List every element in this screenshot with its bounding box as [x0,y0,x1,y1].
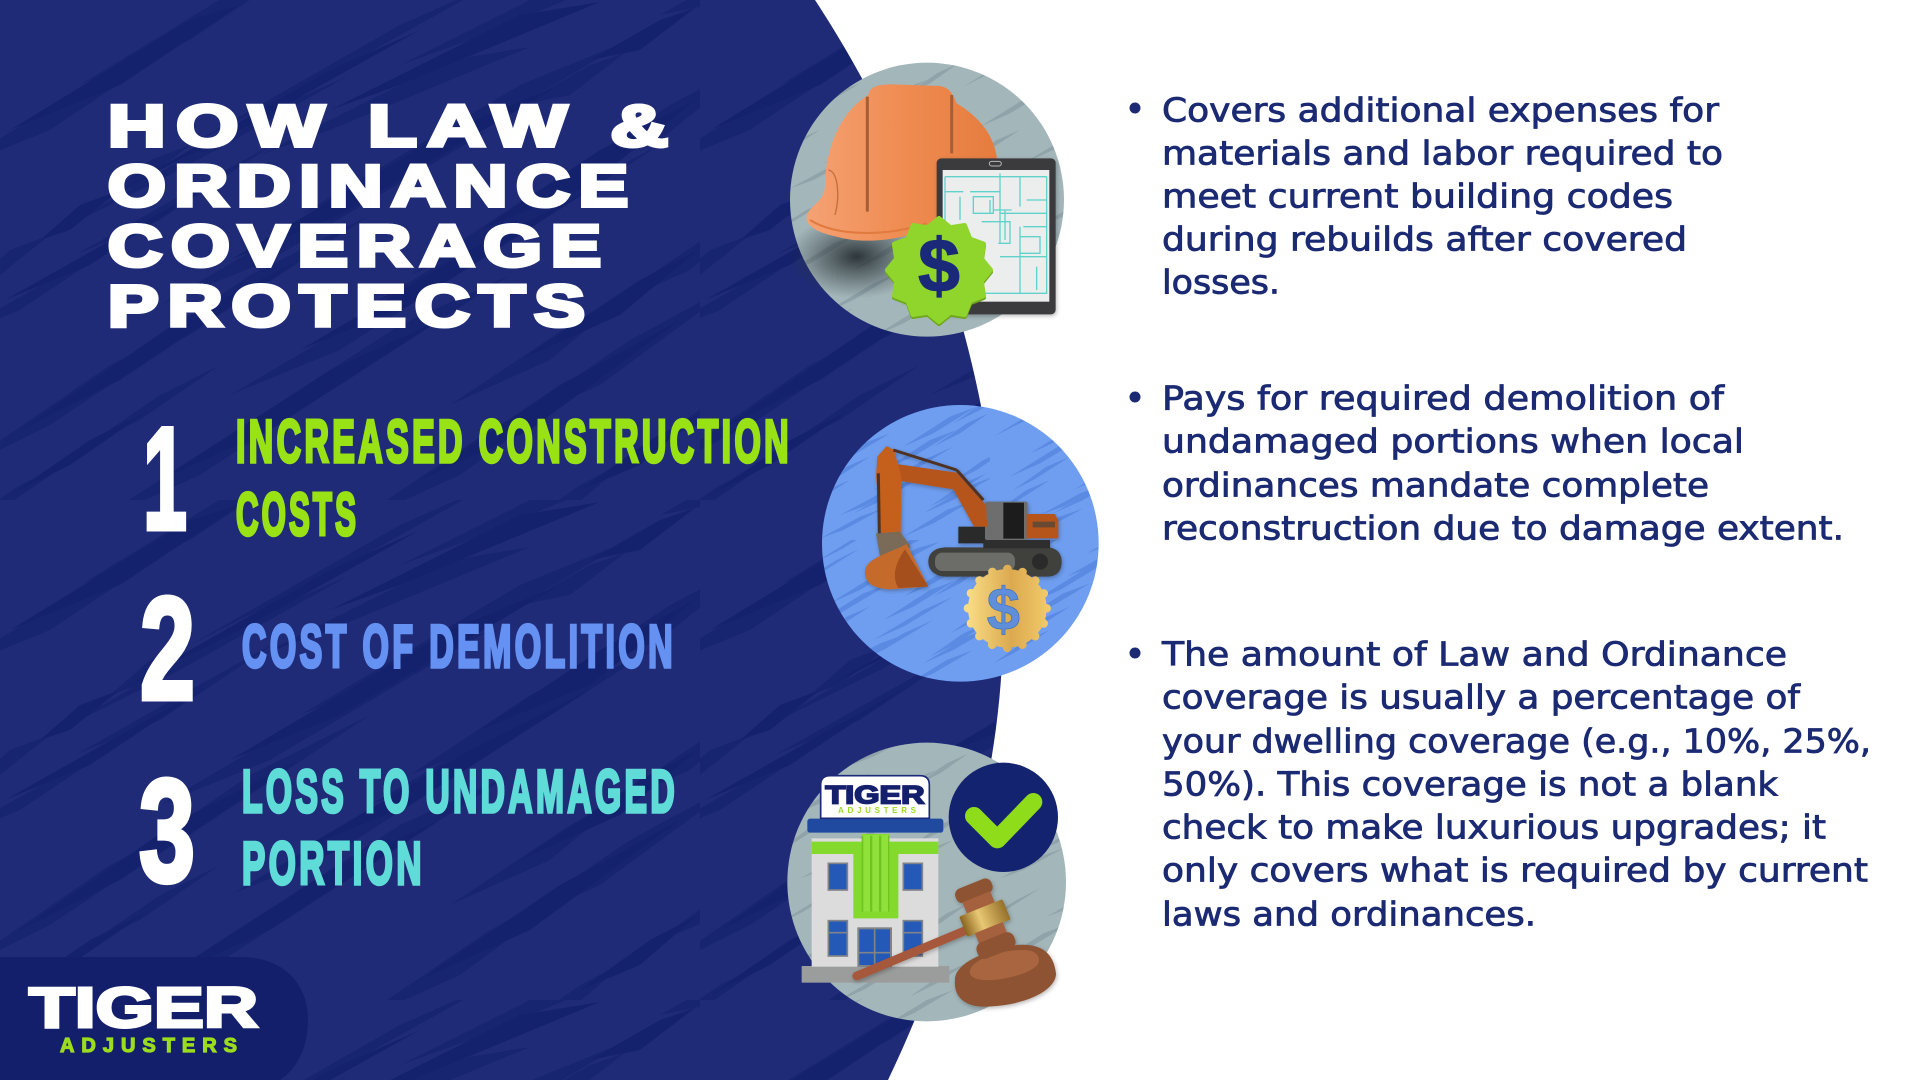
logo: Tiger Adjusters: TIGER [29,976,258,1040]
item 2: cost of demolition: 2 [140,567,195,730]
text block: bullet 1: losses. [1162,262,1280,302]
gavel [857,875,1056,1007]
title: COVERAGE [108,214,610,279]
text block: bullet 2: ordinances mandate complete [1162,466,1709,504]
dollar badge [887,218,991,324]
logo: Tiger Adjusters: ADJUSTERS [60,1035,237,1057]
text block: bullet 1: Covers additional expenses for [1162,90,1719,130]
building sign: ADJUSTERS [838,806,917,815]
text block: bullet 3: coverage is usually a percentage of [1162,678,1801,716]
building [802,776,949,983]
item 3: loss to undamaged portion [139,749,678,912]
title: PROTECTS [108,274,594,339]
text block: bullet 3: The amount of Law and Ordinance [1161,634,1787,674]
text block: bullet 3: only covers what is required by current [1162,850,1868,890]
title: ORDINANCE [108,154,637,219]
text block: bullet 1: during rebuilds after covered [1162,220,1687,258]
text block: bullet 3: your dwelling coverage (e.g., 10%, 25%, [1162,722,1871,760]
title [108,94,679,339]
item 1: increased construction costs: INCREASED CONSTRUCTION [236,408,792,475]
text block: bullet 3: check to make luxurious upgrades; it [1162,808,1826,846]
hard hat [807,84,997,241]
text block: bullet 1: materials and labor required to [1162,134,1723,172]
panel: navy curved background [0,0,1003,1080]
gold dollar badge [968,569,1047,648]
title: HOW LAW & [108,94,679,159]
text block: bullet 2 [1130,378,1844,548]
text block: bullet 3: laws and ordinances. [1162,894,1536,934]
item 2: cost of demolition: COST OF DEMOLITION [242,613,676,680]
text block: bullet 2: undamaged portions when local [1162,422,1744,460]
text block: bullet 3: 50%). This coverage is not a blank [1162,764,1779,804]
item 3: loss to undamaged portion: LOSS TO UNDAMAGED [242,758,678,825]
item 1: increased construction costs: 1 [143,397,187,560]
text block: bullet 3 [1130,634,1871,934]
item 2: cost of demolition [140,567,676,730]
icon: Tiger building, check mark and gavel [787,743,1066,1021]
item 1: increased construction costs: COSTS [236,481,359,548]
item 1: increased construction costs [143,397,792,560]
logo: Tiger Adjusters [0,957,308,1080]
text block: bullet 1: meet current building codes [1162,176,1673,216]
dollar badge: $ [918,224,960,308]
item 3: loss to undamaged portion: 3 [139,749,195,912]
building sign [821,776,929,818]
text block: bullet 2: reconstruction due to damage extent. [1162,508,1844,548]
icon: excavator and gold dollar badge [822,405,1099,682]
icon: hard hat, tablet and dollar badge [787,63,1064,337]
item 3: loss to undamaged portion: PORTION [242,830,425,897]
text block: bullet 2: Pays for required demolition of [1162,378,1726,418]
text block: bullet 1 [1130,90,1723,302]
tablet with floor plan [937,158,1056,314]
excavator [865,446,1062,589]
building sign: TIGER [825,782,925,809]
gold dollar badge: $ [987,576,1020,643]
check mark badge [949,763,1058,872]
